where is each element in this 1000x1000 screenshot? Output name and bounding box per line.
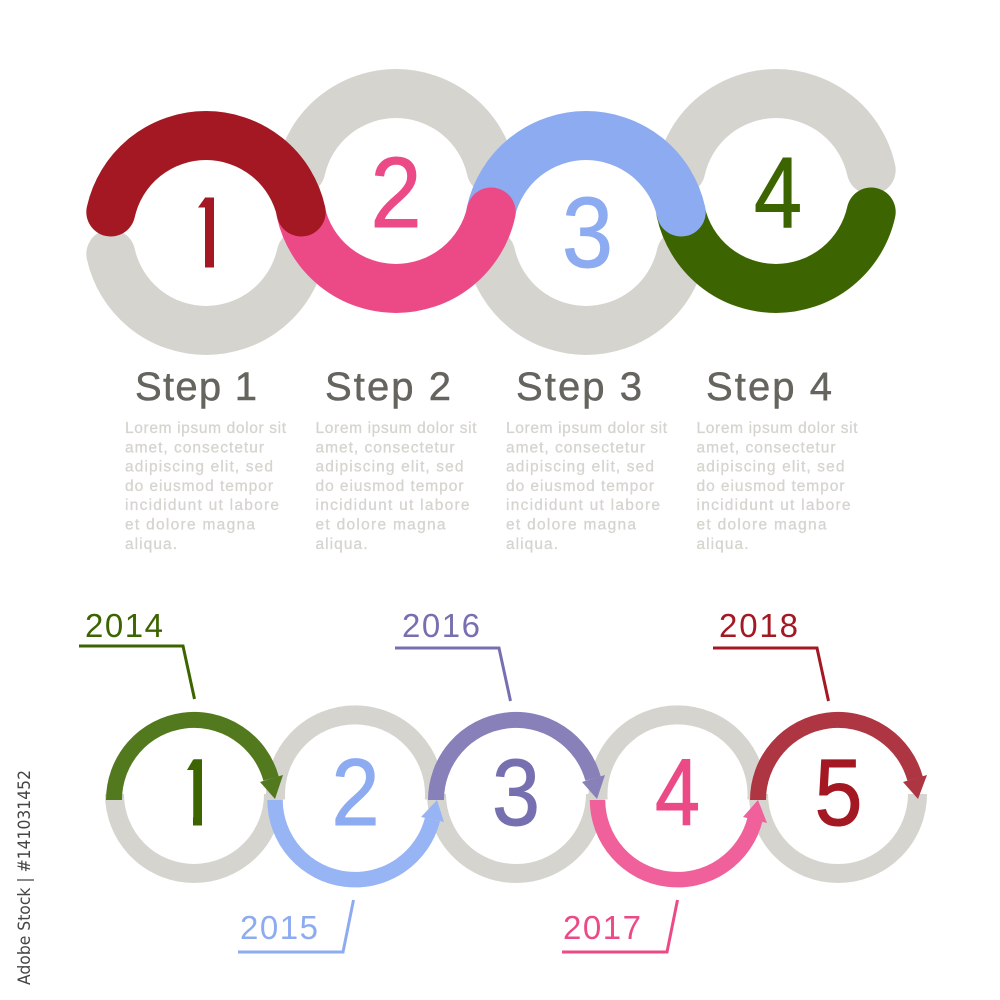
- callout: 2016: [395, 607, 510, 701]
- ring numbers: [180, 137, 802, 289]
- timeline number 4: 4: [655, 740, 700, 846]
- text block: step 2: [316, 420, 477, 553]
- arc: step 4 green: [681, 212, 871, 288]
- text block: step 4: aliqua.: [696, 536, 748, 553]
- callout: 2014: 2014: [85, 607, 163, 644]
- step headings: [135, 365, 832, 409]
- text block: step 4: [696, 420, 858, 553]
- heading: step 3: Step 3: [516, 365, 642, 409]
- number 2: 2: [370, 137, 422, 249]
- step descriptions: [125, 420, 858, 553]
- arrow: 2016 purple: [436, 720, 605, 800]
- callout: 2017: [562, 900, 678, 952]
- callout: 2017: 2017: [563, 909, 641, 946]
- arrow: 2015 blue: [275, 800, 444, 880]
- text block: step 3: [506, 420, 668, 553]
- timeline grey rings: [114, 715, 918, 874]
- number 3: 3: [562, 177, 613, 289]
- arrow: 2018 red: [758, 720, 927, 800]
- text block: step 1: et dolore magna: [125, 516, 255, 534]
- callout: 2016: 2016: [402, 607, 480, 644]
- text block: step 4: amet, consectetur: [696, 439, 836, 456]
- arc: step 1 red: [111, 136, 301, 212]
- callout: 2018: [713, 607, 828, 701]
- text block: step 2: et dolore magna: [316, 516, 446, 534]
- text block: step 2: amet, consectetur: [316, 439, 454, 456]
- vertical stock credit: Adobe Stock | #141031452: [15, 770, 35, 985]
- text block: step 2: adipiscing elit, sed: [316, 459, 464, 476]
- text block: step 1: aliqua.: [125, 536, 177, 553]
- text block: step 4: do eiusmod tempor: [696, 478, 844, 495]
- text block: step 1: do eiusmod tempor: [125, 478, 273, 495]
- arc: step 2 pink: [301, 212, 491, 288]
- text block: step 2: aliqua.: [316, 536, 368, 553]
- text block: step 3: incididunt ut labore: [506, 497, 660, 514]
- heading: step 4: Step 4: [706, 365, 832, 409]
- text block: step 2: do eiusmod tempor: [316, 478, 464, 495]
- text block: step 1: adipiscing elit, sed: [125, 459, 273, 476]
- text block: step 3: et dolore magna: [506, 516, 636, 534]
- grey ring segments: [111, 94, 871, 330]
- text block: step 2: incididunt ut labore: [316, 497, 470, 514]
- heading: step 1: Step 1: [135, 365, 257, 409]
- timeline number 2: 2: [332, 740, 380, 846]
- callout: 2015: 2015: [240, 909, 318, 946]
- text block: step 1: incididunt ut labore: [125, 497, 279, 514]
- number 1: 1: [180, 177, 236, 289]
- timeline number 5: 5: [814, 740, 862, 846]
- text block: step 1: Lorem ipsum dolor sit: [125, 420, 287, 437]
- number 4: 4: [754, 137, 802, 249]
- callout: 2014: [79, 607, 194, 699]
- text block: step 3: adipiscing elit, sed: [506, 459, 654, 476]
- text block: step 4: Lorem ipsum dolor sit: [696, 420, 858, 437]
- text block: step 4: et dolore magna: [696, 516, 827, 534]
- timeline number 1: 1: [170, 740, 223, 846]
- text block: step 2: Lorem ipsum dolor sit: [316, 420, 477, 437]
- heading: step 2: Step 2: [325, 365, 451, 409]
- text block: step 3: aliqua.: [506, 536, 558, 553]
- text block: step 4: incididunt ut labore: [696, 497, 850, 514]
- callout: 2015: [238, 900, 354, 952]
- text block: step 4: adipiscing elit, sed: [696, 459, 844, 476]
- callout: 2018: 2018: [719, 607, 798, 644]
- arrow: 2014 green: [114, 720, 283, 800]
- timeline numbers: [168, 740, 862, 846]
- text block: step 3: Lorem ipsum dolor sit: [506, 420, 668, 437]
- text block: step 1: amet, consectetur: [125, 439, 264, 456]
- arrow: 2017 pink: [598, 800, 767, 880]
- text block: step 3: do eiusmod tempor: [506, 478, 654, 495]
- text block: step 3: amet, consectetur: [506, 439, 645, 456]
- timeline number 3: 3: [492, 740, 540, 846]
- chain of four step rings: [111, 94, 871, 330]
- arc: step 3 blue: [491, 136, 681, 212]
- text block: step 1: [125, 420, 287, 553]
